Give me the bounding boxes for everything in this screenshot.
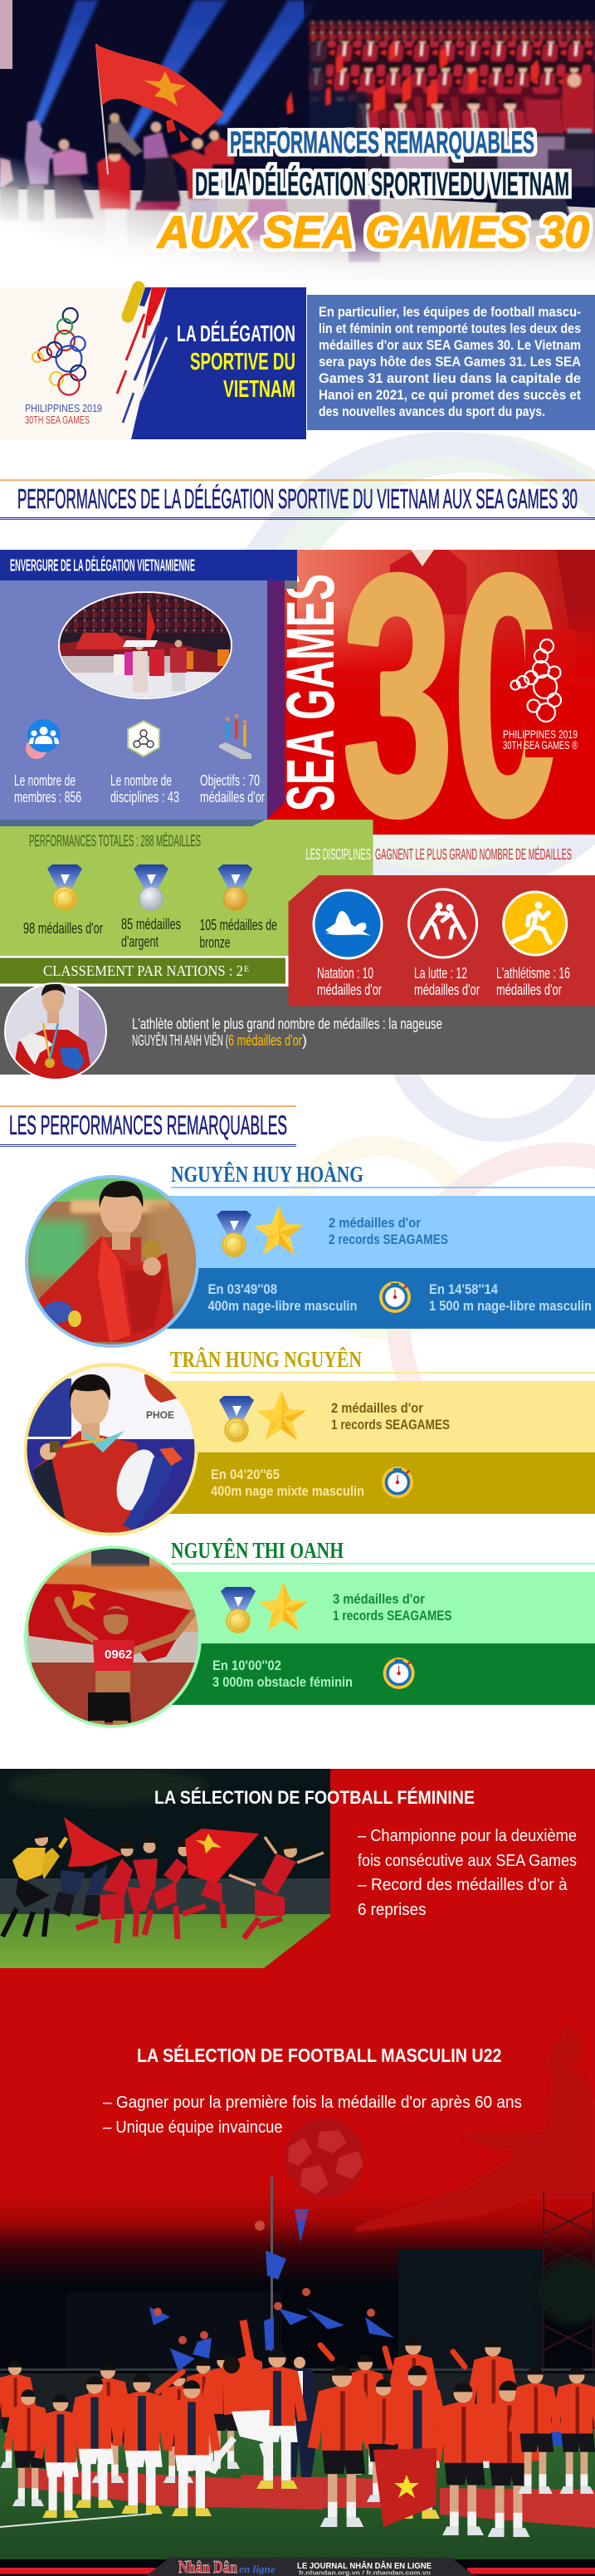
times band: [166, 1643, 595, 1705]
team photo: [0, 1767, 330, 1968]
panel bottom strip: [0, 820, 267, 826]
oval opening ceremony photo: [58, 591, 232, 702]
medal counts: 2 records SEAGAMES: [329, 1232, 448, 1247]
portrait: PHOE: [146, 1409, 174, 1421]
left pale banner stripe: [0, 0, 12, 69]
athlete portrait: [4, 982, 108, 1080]
front row players: [3, 2389, 53, 2506]
stat labels: Objectifs : 70: [200, 772, 260, 789]
record times: 400m nage-libre masculin: [207, 1298, 357, 1314]
panel: nation ranking bar: E: [244, 965, 249, 974]
panel: nation ranking bar: CLASSEMENT PAR NATIONS : 2: [43, 962, 243, 979]
panel: Trân Hung Nguyên: [23, 1347, 595, 1540]
medals band: [166, 1196, 595, 1268]
panel: men's U22 football: [0, 2026, 595, 2559]
stat labels: disciplines : 43: [110, 789, 179, 806]
medal labels: [23, 916, 277, 951]
medal labels: bronze: [199, 934, 231, 951]
stat labels: [14, 772, 265, 806]
panel: la délégation banner: 30TH SEA GAMES: [25, 414, 90, 426]
panel: nation ranking bar: [0, 956, 288, 987]
banner heading: LA DÉLÉGATION: [177, 321, 295, 346]
portrait: [25, 1175, 199, 1349]
icon: athletics: [504, 892, 567, 955]
football women heading: LA SÉLECTION DE FOOTBALL FÉMININE: [154, 1787, 475, 1808]
medal counts: [333, 1591, 451, 1623]
total heading: PERFORMANCES TOTALES : 288 MÉDAILLES: [29, 833, 201, 850]
crowd of athletes in red blazers: [286, 20, 595, 187]
icon: wrestling: [409, 889, 477, 957]
icon: medal: [217, 1211, 251, 1256]
name: NGUYÊN HUY HOÀNG: [171, 1162, 363, 1187]
football women bullet points: – Championne pour la deuxième: [358, 1827, 577, 1845]
record times: En 14'58''14: [429, 1281, 498, 1297]
rotated SEA GAMES label: SEA GAMES: [273, 574, 349, 811]
background: faint sports rings: [228, 444, 595, 1486]
back row players: [0, 2361, 38, 2468]
small red flags behind the flag: [166, 119, 189, 143]
flag held by the team (left): [64, 1817, 123, 1867]
discipline labels: La lutte : 12: [414, 965, 467, 982]
icon: white rings logo: [511, 639, 561, 722]
raised arms: [158, 2345, 465, 2392]
panel: red football background: [0, 1769, 595, 2576]
icon: medal: [221, 1587, 256, 1633]
white fade at the bottom left of the hero: [0, 141, 595, 287]
icon: Vietnamese flag: [95, 44, 224, 135]
panel: women's football: [0, 1767, 577, 1968]
icon: SEA Games rings logo: [32, 308, 85, 395]
discipline labels: médailles d'or: [317, 982, 382, 998]
blue diagonal block: [131, 287, 306, 439]
discipline labels: médailles d'or: [496, 982, 562, 998]
icon: medal: [219, 1396, 254, 1442]
name: NGUYÊN THI OANH: [171, 1538, 344, 1563]
icon: stopwatch: [383, 1658, 415, 1689]
icon: football: [285, 2118, 364, 2198]
icon: members: [26, 719, 61, 759]
performers in traditional dress: [0, 113, 571, 262]
title line 3: AUX SEA GAMES 30: [156, 206, 589, 257]
panel: delegation scope: ENVERGURE DE LA DÉLÉGATION VIETNAMIENNE: [10, 556, 195, 575]
blue light beams: [32, 0, 319, 141]
header bar: [0, 550, 297, 580]
panel: Nguyên Thi Oanh: [23, 1538, 595, 1733]
panel: top athlete: NGUYÊN THI ANH VIÊN (: [132, 1032, 228, 1049]
medal labels: d'argent: [121, 933, 159, 950]
icon: star: [256, 1391, 306, 1440]
icon: Vietnamese flag in photo: [373, 2448, 436, 2527]
medal counts: 1 records SEAGAMES: [333, 1608, 451, 1623]
icon: star: [259, 1582, 309, 1631]
panel: la délégation banner: [0, 287, 306, 439]
panel: men's U22 football: – Unique équipe invaincue: [103, 2118, 283, 2137]
section heading: remarkable performances: LES PERFORMANCES REMARQUABLES: [9, 1110, 287, 1140]
athlete text: L'athlète obtient le plus grand nombre de médailles : la nageuse: [132, 1016, 442, 1032]
thrown bouquets: [149, 2209, 394, 2371]
portrait: [23, 1362, 199, 1540]
blurred red blazers photo: [285, 550, 595, 676]
stat labels: membres : 856: [14, 789, 81, 806]
player silhouette: [354, 2026, 595, 2232]
record times: En 03'49''08: [207, 1281, 277, 1297]
flag pole: [96, 44, 108, 174]
record times: [207, 1281, 592, 1314]
record times: [212, 1658, 353, 1690]
panel: delegation scope: [0, 550, 297, 826]
flag held by the team (right): [185, 1829, 259, 1883]
stat labels: Le nombre de: [14, 772, 76, 789]
name: TRÂN HUNG NGUYÊN: [170, 1347, 362, 1372]
medal counts: [331, 1400, 450, 1432]
medals band: [166, 1572, 595, 1643]
medals band: [166, 1381, 595, 1452]
record times: 3 000m obstacle féminin: [212, 1674, 353, 1690]
icon: swimming: [314, 890, 382, 958]
disciplines heading: LES DISCIPLINES: [305, 846, 371, 863]
hero photo: Vietnamese delegation parade: [0, 0, 595, 287]
football women bullet points: fois consécutive aux SEA Games: [358, 1852, 577, 1870]
goalkeeper and staff: [2, 1831, 108, 1937]
title: [156, 125, 589, 257]
panel: introduction text: des nouvelles avances du sport du pays.: [319, 404, 545, 419]
white fade along the bottom of the hero: [0, 233, 595, 287]
football women bullet points: 6 reprises: [358, 1901, 427, 1919]
panel: introduction text: Games 31 auront lieu dans la capitale de: [319, 370, 581, 386]
discipline labels: Natation : 10: [317, 965, 373, 982]
players in red: [100, 1854, 296, 1920]
medal counts: 2 médailles d'or: [331, 1400, 423, 1416]
stage floor: [0, 189, 595, 286]
stadium at night: [398, 2250, 543, 2374]
team celebration photo: [0, 2177, 595, 2559]
pitch: [0, 2429, 595, 2559]
record times: En 04'20''65: [211, 1467, 280, 1482]
advertising boards: [22, 2468, 323, 2510]
medal labels: 105 médailles de: [199, 917, 277, 933]
discipline labels: [317, 965, 570, 998]
record times: 400m nage mixte masculin: [211, 1483, 364, 1499]
football men bullet points: – Gagner pour la première fois la médaille d'or après 60 ans: [103, 2094, 522, 2112]
icon: gold medal: [47, 864, 82, 910]
record times: [211, 1467, 364, 1499]
decorative coloured stripes: [117, 287, 167, 423]
panel: top athlete: ): [302, 1032, 307, 1049]
times band: [166, 1268, 595, 1329]
medal labels: 85 médailles: [121, 916, 181, 933]
panel: Nguyên Huy Hoàng: [25, 1162, 595, 1349]
stat labels: médailles d'or: [200, 789, 265, 806]
medal counts: 3 médailles d'or: [333, 1591, 425, 1607]
panel: total performances: [0, 820, 373, 956]
icon: stopwatch: [379, 1281, 411, 1313]
icon: podium athletes: [219, 713, 251, 759]
football men heading: LA SÉLECTION DE FOOTBALL MASCULIN U22: [137, 2044, 501, 2066]
footer: Nhân Dân en ligne: en ligne: [239, 2563, 276, 2575]
discipline labels: médailles d'or: [414, 982, 480, 998]
record times: En 10'00''02: [212, 1658, 281, 1673]
footer: Nhân Dân en ligne: [0, 2557, 595, 2576]
icon: disciplines: [128, 721, 159, 757]
football women bullet points: – Record des médailles d'or à: [358, 1876, 568, 1894]
leaping player: [212, 2320, 271, 2473]
panel: top athlete: 6 médailles d'or: [228, 1032, 302, 1049]
icon: bronze medal: [217, 864, 252, 910]
portrait: 0962: [105, 1648, 132, 1662]
icon: star: [254, 1206, 304, 1255]
panel: top athlete: [0, 982, 595, 1080]
times band: [166, 1452, 595, 1514]
medal counts: [329, 1215, 448, 1247]
dark stage curtain: [0, 0, 595, 158]
panel: la délégation banner: VIETNAM: [223, 376, 295, 403]
football women bullet points: [358, 1827, 577, 1919]
panel: la délégation banner: SPORTIVE DU: [190, 349, 295, 375]
medal counts: 2 médailles d'or: [329, 1215, 421, 1231]
footer caption: LE JOURNAL NHÂN DÂN EN LIGNE: [297, 2560, 432, 2571]
stat labels: Le nombre de: [110, 772, 172, 789]
panel: SEA Games 30 red poster: [267, 507, 595, 884]
logo caption: PHILIPPINES 2019: [25, 402, 102, 414]
medal labels: 98 médailles d'or: [23, 920, 103, 937]
panel: disciplines with most medals: [289, 846, 595, 1006]
coach in suit: [283, 2357, 316, 2477]
portrait: [23, 1545, 202, 1733]
icon: silver medal: [134, 864, 168, 910]
medal counts: 1 records SEAGAMES: [331, 1417, 450, 1432]
icon: stopwatch: [382, 1467, 413, 1498]
panel: introduction text: [307, 295, 595, 430]
